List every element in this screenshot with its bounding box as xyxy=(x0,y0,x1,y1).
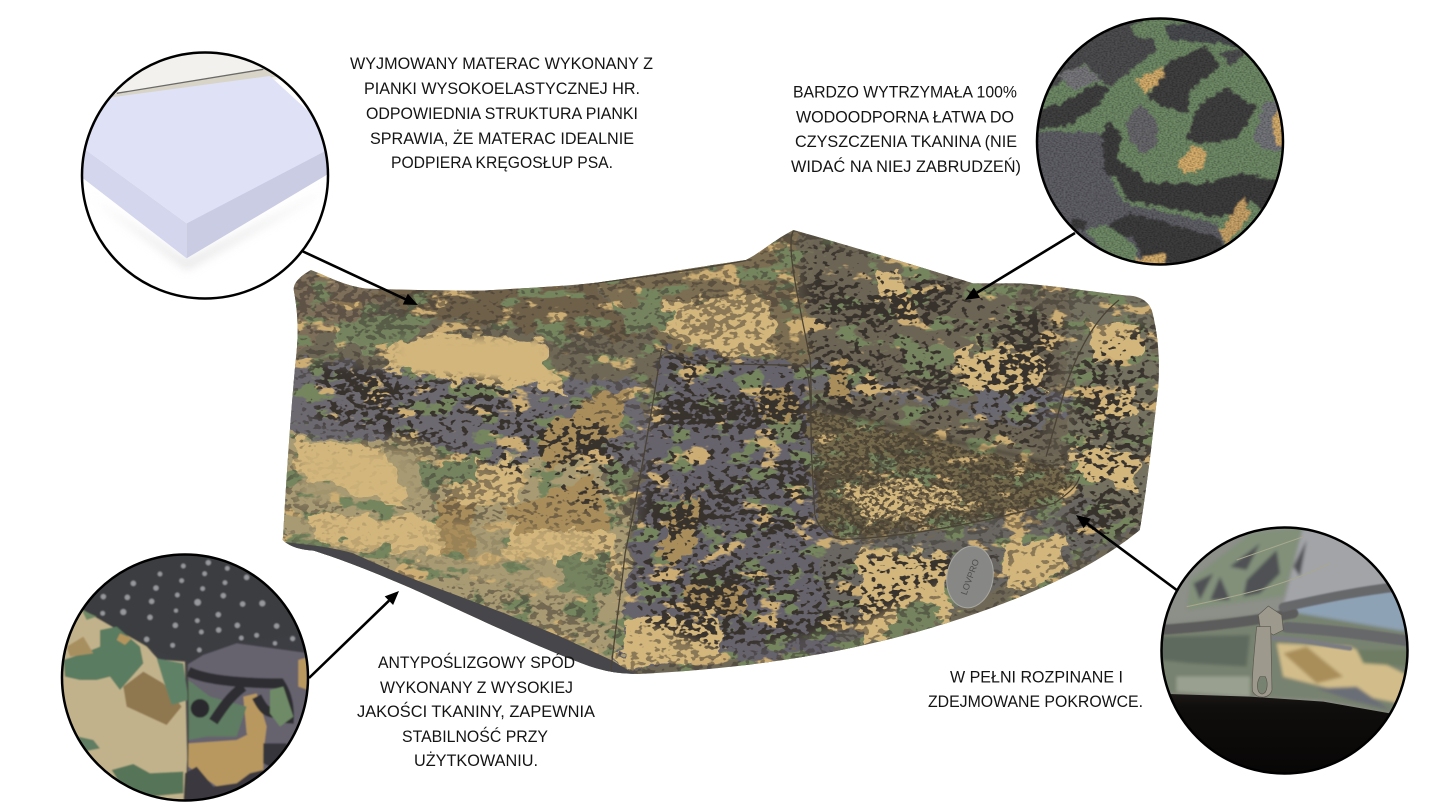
dark speckle pattern xyxy=(280,225,1165,685)
arrow: fabric to bed xyxy=(965,233,1075,300)
text: underside description: ANTYPOŚLIZGOWY SPÓD xyxy=(378,653,575,672)
arrow: mattress to bed xyxy=(302,251,418,305)
underside dark band xyxy=(280,542,639,677)
text: zipper description xyxy=(928,668,1143,711)
text: underside description: STABILNOŚĆ PRZY xyxy=(402,727,548,746)
circle: camouflage fabric detail xyxy=(1030,17,1290,273)
circle: anti-slip underside detail xyxy=(57,554,313,807)
circle: zipper detail xyxy=(1160,526,1409,775)
text: fabric description: WIDAĆ NA NIEJ ZABRUDZEŃ) xyxy=(791,157,1021,176)
text: mattress description: ODPOWIEDNIA STRUKTURA PIANKI xyxy=(366,105,638,123)
text: fabric description xyxy=(791,84,1021,176)
text: mattress description: PIANKI WYSOKOELASTYCZNEJ HR. xyxy=(364,80,640,98)
panel: camouflage dog bed xyxy=(280,225,1165,685)
text: underside description: WYKONANY Z WYSOKIEJ xyxy=(380,679,573,697)
text: underside description: JAKOŚCI TKANINY, ZAPEWNIA xyxy=(357,702,595,721)
text: zipper description: W PEŁNI ROZPINANE I xyxy=(950,668,1123,686)
tan camouflage layer xyxy=(280,225,1165,685)
text: fabric description: WODOODPORNA ŁATWA DO xyxy=(796,108,1014,126)
piping seams xyxy=(594,231,1119,670)
text: fabric description: BARDZO WYTRZYMAŁA 100% xyxy=(793,84,1017,102)
text: underside description xyxy=(357,653,595,770)
brand badge: LOVPRO xyxy=(959,558,981,596)
green camouflage layer xyxy=(280,225,1165,685)
text: mattress description: SPRAWIA, ŻE MATERAC IDEALNIE xyxy=(370,129,634,148)
text: mattress description: PODPIERA KRĘGOSŁUP PSA. xyxy=(391,154,613,172)
text: mattress description xyxy=(350,55,653,172)
bed colour patches xyxy=(280,233,1155,673)
arrow: underside to bed xyxy=(309,591,399,678)
seat cushion xyxy=(811,410,1076,538)
text: fabric description: CZYSZCZENIA TKANINA (NIE xyxy=(795,133,1017,151)
large tan patches xyxy=(297,270,1144,670)
arrow: zipper to bed xyxy=(1076,515,1178,591)
seat shadow xyxy=(810,402,1043,462)
brand badge xyxy=(942,542,998,612)
text: zipper description: ZDEJMOWANE POKROWCE. xyxy=(928,693,1143,711)
circle: foam mattress detail xyxy=(80,51,330,300)
text: mattress description: WYJMOWANY MATERAC WYKONANY Z xyxy=(350,55,653,73)
text: underside description: UŻYTKOWANIU. xyxy=(414,751,538,770)
